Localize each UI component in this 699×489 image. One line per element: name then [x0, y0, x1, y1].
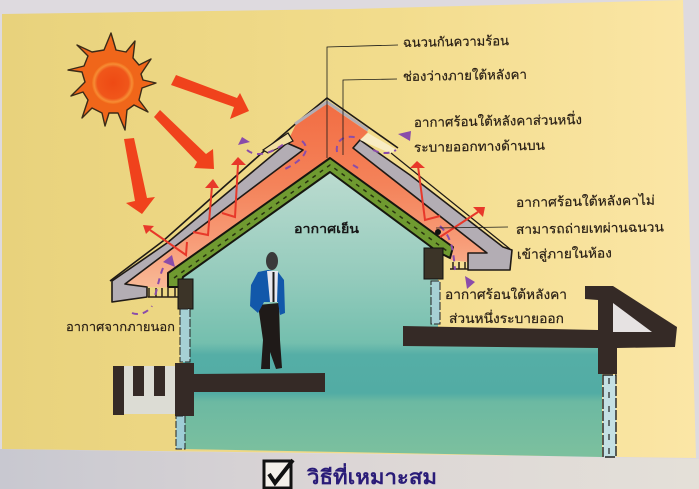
roof section [110, 98, 512, 302]
icon: sun [68, 33, 156, 130]
head [266, 252, 278, 270]
icon: checkbox [264, 460, 293, 488]
left ridge vent [263, 133, 293, 153]
parapet opening [613, 303, 652, 332]
roof outer sketch line [110, 98, 510, 281]
icon: person [250, 252, 285, 369]
label: hot air vents upward: อากาศร้อนใต้หลังคาส่วนหนึ่ง [414, 111, 582, 130]
floor slab and parapet right [403, 286, 677, 374]
label: hot air does not pass insulation: อากาศร้อนใต้หลังคาไม่ [516, 193, 655, 210]
lower right wall [603, 375, 616, 457]
label: hot air partly vents out: อากาศร้อนใต้หลังคา [445, 287, 567, 302]
black insulation dot [435, 229, 441, 235]
label: cool air: อากาศเย็น [294, 221, 360, 236]
room interior [183, 165, 602, 457]
label: hot air does not pass insulation: เข้าสู่ภายในห้อง [517, 245, 612, 263]
jacket [250, 270, 285, 315]
footer title: วิธีที่เหมาะสม [306, 462, 437, 489]
arrow: sun ray down [124, 138, 155, 214]
right window [431, 281, 440, 324]
left wall post [178, 279, 193, 309]
label: space under the roof: ช่องว่างภายใต้หลังคา [403, 67, 527, 84]
label: hot air partly vents out [445, 287, 567, 326]
legs [258, 303, 282, 369]
eave vents [148, 262, 468, 297]
right wall post [424, 248, 443, 279]
purple airflow dashes [132, 131, 475, 314]
leader lines [327, 45, 508, 228]
label: hot air does not pass insulation [516, 193, 664, 263]
label: insulation: ฉนวนกันความร้อน [403, 33, 509, 50]
left window [180, 309, 190, 362]
arrow: sun ray right [171, 75, 249, 119]
green insulation [168, 158, 453, 287]
label: hot air vents upward: ระบายออกทางด้านบน [414, 138, 545, 155]
lower left wall [176, 416, 185, 449]
arrow: sun ray diagonal [154, 110, 214, 169]
house structure [113, 248, 677, 457]
label: hot air partly vents out: ส่วนหนึ่งระบายออก [449, 310, 564, 326]
right ridge vent [360, 133, 397, 153]
floor slab left [175, 363, 325, 416]
grey roof layer right [353, 140, 512, 270]
label: hot air vents upward [414, 111, 582, 155]
label: outside air: อากาศจากภายนอก [66, 320, 175, 334]
grey roof layer left [112, 143, 303, 302]
attic air space [125, 104, 487, 288]
left balcony [113, 366, 175, 415]
label: hot air does not pass insulation: สามารถถ่ายเทผ่านฉนวน [516, 219, 664, 237]
big solar arrows [124, 75, 249, 214]
thin heat arrows [143, 157, 485, 255]
shirt and tie [267, 271, 278, 302]
footer band [0, 449, 699, 489]
